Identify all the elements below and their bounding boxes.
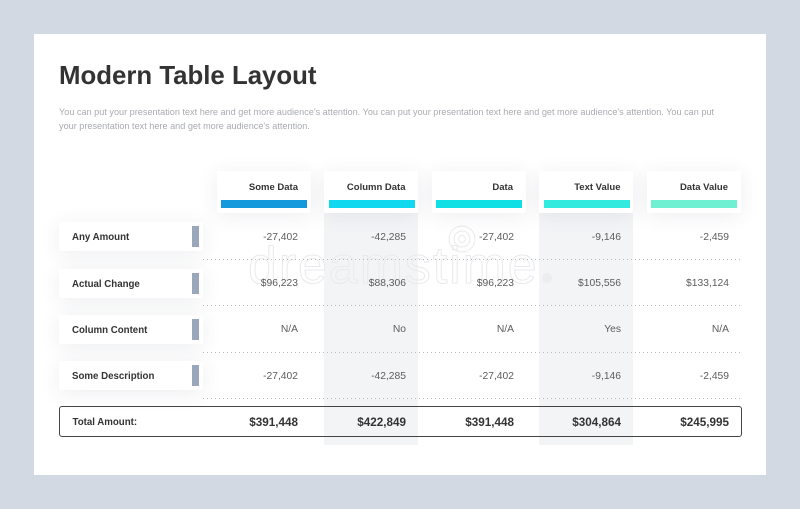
row 1 values: -27,402 [479, 232, 514, 243]
white card [34, 34, 766, 475]
total label: Total Amount: [72, 417, 137, 428]
row 2 values: $96,223 [261, 278, 298, 289]
row 2 values: $133,124 [686, 278, 729, 289]
row 3 values: No [393, 324, 406, 335]
header: Data [432, 171, 526, 213]
header: Some Data: Some Data [249, 182, 298, 193]
row label: Some Description: Some Description [72, 371, 154, 382]
header: Some Data [216, 171, 310, 213]
header: Text Value: Text Value [574, 182, 620, 193]
header: Data Value: Data Value [680, 182, 728, 193]
row 2 values [260, 278, 729, 289]
row label: Column Content [59, 315, 203, 344]
total values: $304,864 [572, 416, 621, 428]
row label: Any Amount [59, 222, 203, 251]
row label: Column Content: Column Content [72, 325, 147, 336]
row 4 values: -42,285 [371, 371, 406, 382]
total values: $391,448 [465, 416, 514, 428]
row 3 values: N/A [497, 324, 514, 335]
row 1 values: -42,285 [371, 232, 406, 243]
row label: Actual Change: Actual Change [72, 278, 140, 290]
row 2 values: $96,223 [477, 278, 514, 289]
intro text: You can put your presentation text here and get more audience's attention. You can put your presentation text here and get more audience's attention. You can put your presentation text here and get more audience's attention. [59, 107, 714, 131]
row 1 values: -27,402 [263, 232, 298, 243]
header: Data: Data [492, 182, 513, 193]
total values [249, 416, 729, 428]
row 3 values: N/A [712, 324, 729, 335]
row 4 values: -2,459 [700, 371, 729, 382]
shaded column: Column Data [324, 213, 418, 445]
header: Text Value [539, 171, 633, 213]
row 4 values: -27,402 [263, 371, 298, 382]
row 2 values: $88,306 [369, 278, 406, 289]
total row [58, 406, 742, 437]
row 3 values: N/A [281, 324, 298, 335]
total values: $391,448 [249, 416, 298, 428]
header: Data Value [646, 171, 740, 213]
total values: $422,849 [357, 416, 406, 428]
row 2 values: $105,556 [578, 278, 621, 289]
row 1 values: -9,146 [592, 232, 621, 243]
row 4 values: -9,146 [592, 371, 621, 382]
row label: Some Description [59, 361, 203, 390]
shaded column: Text Value [539, 213, 633, 445]
total values: $245,995 [680, 416, 729, 428]
row 1 values: -2,459 [700, 232, 729, 243]
row label: Any Amount: Any Amount [72, 232, 129, 243]
row 1 values [263, 232, 729, 243]
header: Column Data [324, 171, 418, 213]
row 4 values: -27,402 [479, 371, 514, 382]
row 3 values: Yes [604, 324, 621, 335]
row 3 values [281, 324, 729, 335]
title: Modern Table Layout [59, 62, 317, 90]
row 4 values [263, 371, 729, 382]
header: Column Data: Column Data [347, 182, 406, 193]
row label: Actual Change [59, 268, 203, 298]
